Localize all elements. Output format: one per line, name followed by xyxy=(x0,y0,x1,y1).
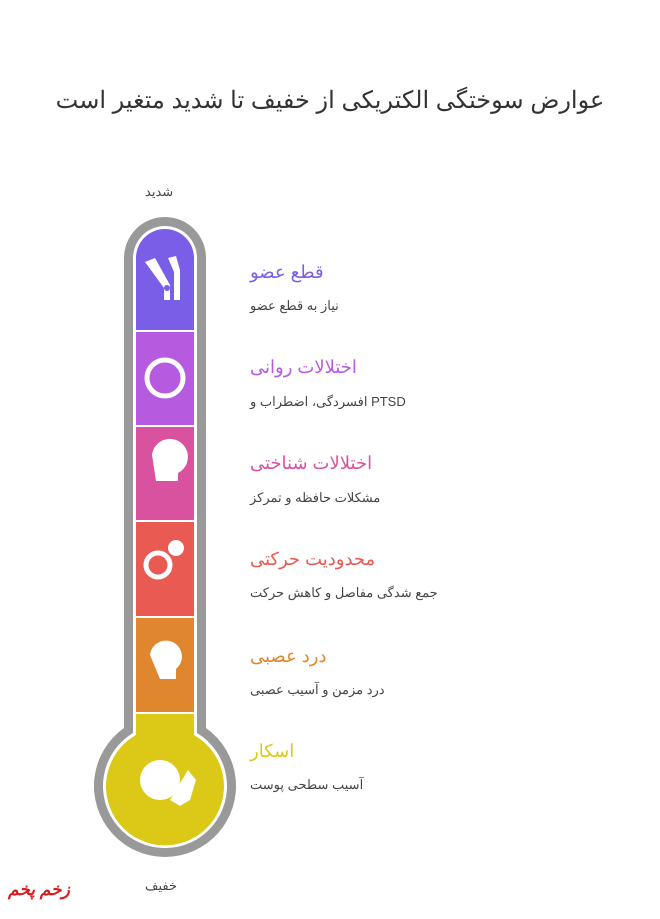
text: PTSD افسردگی، اضطراب و xyxy=(250,394,406,409)
label: mild: خفیف xyxy=(145,878,177,893)
item: psychological: اختلالات روانی xyxy=(250,357,357,377)
item: amputation: قطع عضو xyxy=(250,262,324,282)
text: جمع شدگی مفاصل و کاهش حرکت xyxy=(250,585,438,600)
label: severe: شدید xyxy=(145,184,173,199)
text: نیاز به قطع عضو xyxy=(250,298,339,313)
item: scar: اسکار xyxy=(250,741,294,761)
icons (simplified) xyxy=(140,256,196,806)
logo: زخم پخم xyxy=(8,880,70,899)
item: neuropathic pain: درد عصبی xyxy=(250,646,327,666)
title: عوارض سوختگی الکتریکی از خفیف تا شدید متغیر است xyxy=(56,87,604,114)
text: آسیب سطحی پوست xyxy=(250,777,363,792)
item: cognitive: اختلالات شناختی xyxy=(250,453,372,473)
text: مشکلات حافظه و تمرکز xyxy=(250,490,380,505)
text: درد مزمن و آسیب عصبی xyxy=(250,682,385,697)
item: mobility: محدودیت حرکتی xyxy=(250,549,375,569)
